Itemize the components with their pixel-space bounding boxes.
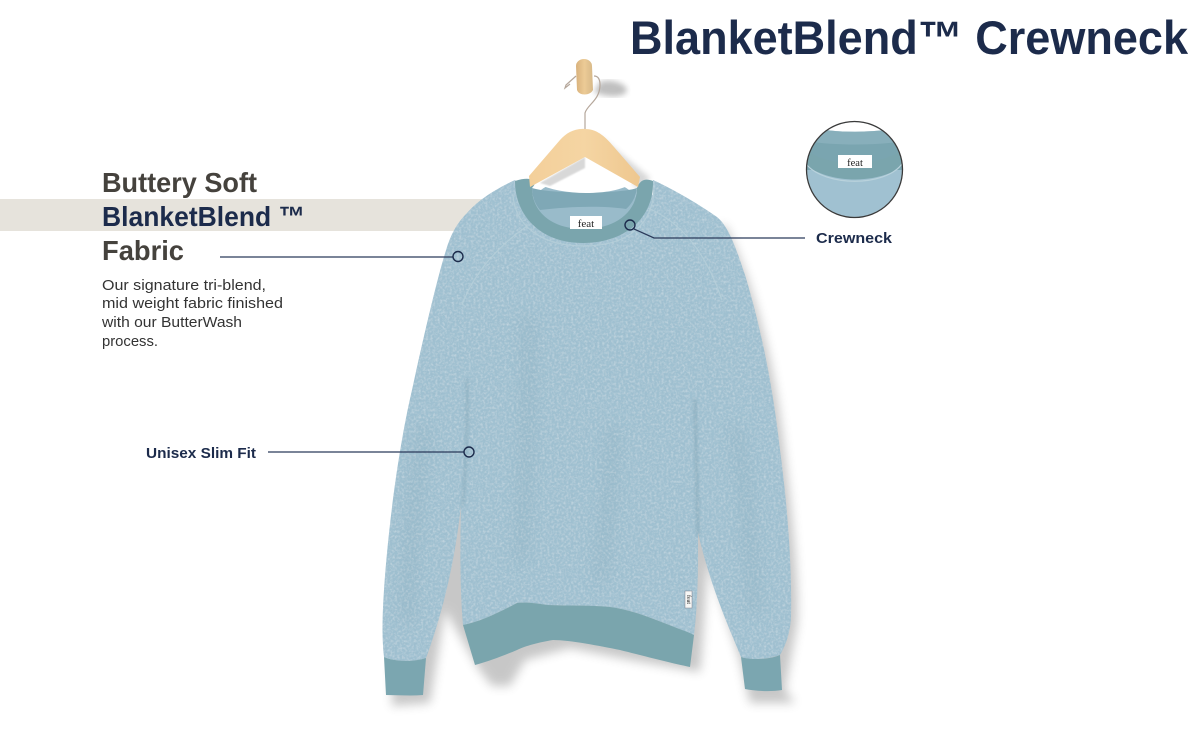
fabric description: Our signature tri-blend, <box>102 277 266 294</box>
side tag <box>685 591 692 608</box>
fabric description: with our ButterWash <box>101 314 242 331</box>
callout: unisex slim fit: Unisex Slim Fit <box>146 446 256 462</box>
fabric heading: Fabric <box>102 235 184 266</box>
left cuff <box>384 657 426 695</box>
wooden hanger body <box>529 129 640 187</box>
collar <box>515 179 653 243</box>
callout: crewneck <box>625 220 893 247</box>
side tag: feat <box>685 595 692 604</box>
callout: crewneck: Crewneck <box>816 231 893 247</box>
highlight band <box>0 199 495 231</box>
fabric description: process. <box>102 333 158 350</box>
fabric heading: Buttery Soft <box>102 167 257 198</box>
wooden peg <box>576 59 593 94</box>
hanger <box>529 59 640 193</box>
title: BlanketBlend™ Crewneck <box>630 11 1189 64</box>
fabric heading <box>102 167 305 266</box>
detail inset: crewneck close-up <box>806 120 904 218</box>
callout: unisex slim fit <box>146 446 474 462</box>
garment shadow <box>392 81 798 706</box>
neck inside back <box>532 188 637 210</box>
sweater fabric: body and sleeves <box>382 180 791 661</box>
right cuff <box>741 655 782 691</box>
sweater <box>382 178 791 695</box>
fabric heading: BlanketBlend ™ <box>102 201 305 232</box>
sleeve and body boundary creases <box>463 380 698 535</box>
callout: fabric <box>220 252 463 262</box>
broad fabric folds <box>408 320 755 620</box>
fabric description <box>101 277 283 350</box>
detail inset: crewneck close-up: feat <box>847 158 863 169</box>
hem ribbing <box>463 603 694 667</box>
fabric description: mid weight fabric finished <box>102 295 283 312</box>
neck inside front <box>532 178 638 232</box>
neck label: feat <box>578 218 594 230</box>
hook wire <box>565 76 600 129</box>
neck label <box>570 216 602 230</box>
neck opening white gap <box>536 157 633 193</box>
seams <box>462 182 722 305</box>
